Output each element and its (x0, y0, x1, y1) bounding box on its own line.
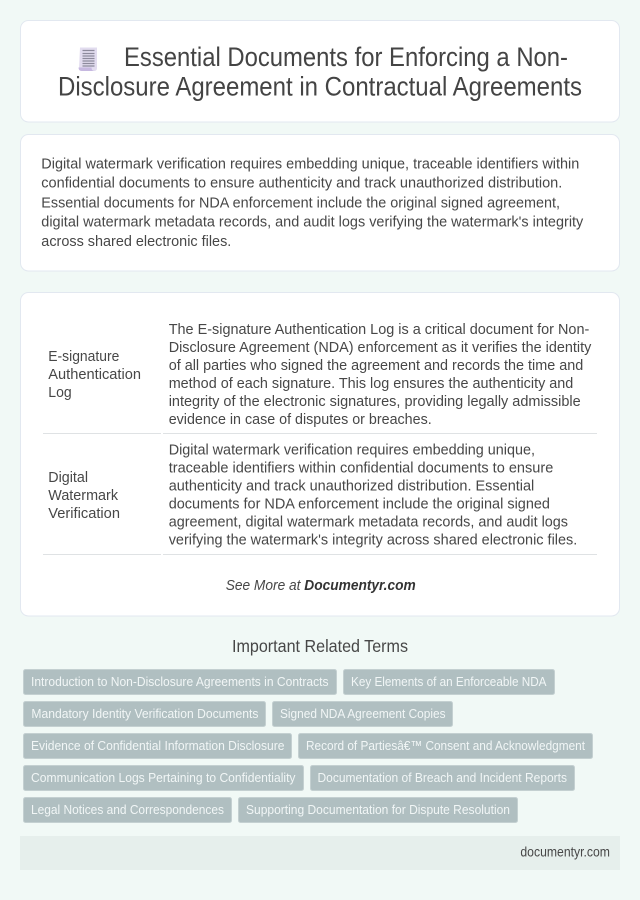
table row: Digital Watermark Verification (43, 443, 597, 555)
row text: Digital watermark description: documents for NDA enforcement include the original signed (169, 497, 550, 513)
row label: E-signature Authentication Log: Log (48, 385, 72, 401)
row label: E-signature Authentication Log: E-signature (48, 349, 119, 365)
row text: Digital watermark description (169, 443, 577, 549)
row text: E-signature description (169, 322, 592, 428)
heading: Important Related Terms: Important Related Terms (232, 636, 408, 656)
panel: introduction (20, 134, 620, 271)
tag list: related terms: Key Elements of an Enforceable NDA (351, 674, 547, 689)
tag list: related terms: Introduction to Non-Disclosure Agreements in Contracts (31, 674, 329, 689)
tag list: related terms: Supporting Documentation for Dispute Resolution (246, 802, 510, 817)
row label: Digital Watermark Verification: Digital (48, 470, 88, 486)
text block: introduction paragraph: confidential documents to ensure authenticity and track unauthorized distribution. (41, 176, 562, 192)
tag list: related terms: Evidence of Confidential Information Disclosure (31, 738, 284, 753)
tag list: related terms: Mandatory Identity Verification Documents (31, 706, 259, 721)
text block: introduction paragraph: digital watermark metadata records, and audit logs verifying the watermark's integrity (41, 215, 584, 231)
tag list: related terms: Legal Notices and Correspondences (31, 802, 224, 817)
text block: introduction paragraph: Essential documents for NDA enforcement include the original signed agreement, (41, 195, 560, 211)
row text: Digital watermark description: traceable identifiers within confidential documents to ensure (169, 461, 553, 477)
row text: Digital watermark description: agreement, digital watermark metadata records, and audit logs (169, 515, 568, 531)
text block: introduction paragraph (41, 156, 584, 250)
row label: E-signature Authentication Log (48, 349, 141, 401)
title: Essential Documents for Enforcing a Non- (124, 42, 568, 72)
table row: E-signature Authentication Log (43, 322, 597, 434)
icon: document receipt (78, 48, 97, 71)
row label: E-signature Authentication Log: Authentication (48, 367, 141, 383)
tag list: related terms: Communication Logs Pertaining to Confidentiality (31, 770, 296, 785)
tag list: related terms: Signed NDA Agreement Copies (280, 706, 446, 721)
row text: E-signature description: of all parties who signed the agreement and records the time and (169, 358, 583, 374)
row label: Digital Watermark Verification: Verification (48, 506, 120, 522)
title (58, 42, 582, 101)
panel: document table (20, 292, 620, 616)
tag list: related terms: Record of Partiesâ€™ Consent and Acknowledgment (306, 738, 585, 753)
row text: E-signature description: The E-signature Authentication Log is a critical document for Non- (169, 322, 589, 338)
text block: introduction paragraph: Digital watermark verification requires embedding unique, traceable identifiers within (41, 156, 579, 172)
footer (20, 836, 620, 870)
row text: E-signature description: method of each signature. This log ensures the authenticity and (169, 376, 573, 392)
row label: Digital Watermark Verification (48, 470, 120, 522)
tag list: related terms: Documentation of Breach and Incident Reports (318, 770, 567, 785)
text block: introduction paragraph: across shared electronic files. (41, 234, 231, 250)
row text: E-signature description: evidence in case of disputes or breaches. (169, 412, 432, 428)
link: See More at Documentyr.com: See More at Documentyr.com (226, 578, 416, 594)
tag list: related terms (24, 670, 592, 822)
row text: Digital watermark description: Digital watermark verification requires embedding unique, (169, 443, 535, 459)
title: Disclosure Agreement in Contractual Agreements (58, 71, 582, 101)
row text: Digital watermark description: authenticity and track unauthorized distribution. Essential (169, 479, 534, 495)
row text: E-signature description: integrity of the electronic signatures, providing legally admissible (169, 394, 581, 410)
row label: Digital Watermark Verification: Watermark (48, 488, 119, 504)
row text: Digital watermark description: verifying the watermark's integrity across shared electronic files. (169, 533, 577, 549)
panel: title card (20, 20, 620, 122)
row text: E-signature description: Disclosure Agreement (NDA) enforcement as it verifies the identity (169, 340, 592, 356)
footer: documentyr.com (520, 844, 610, 860)
